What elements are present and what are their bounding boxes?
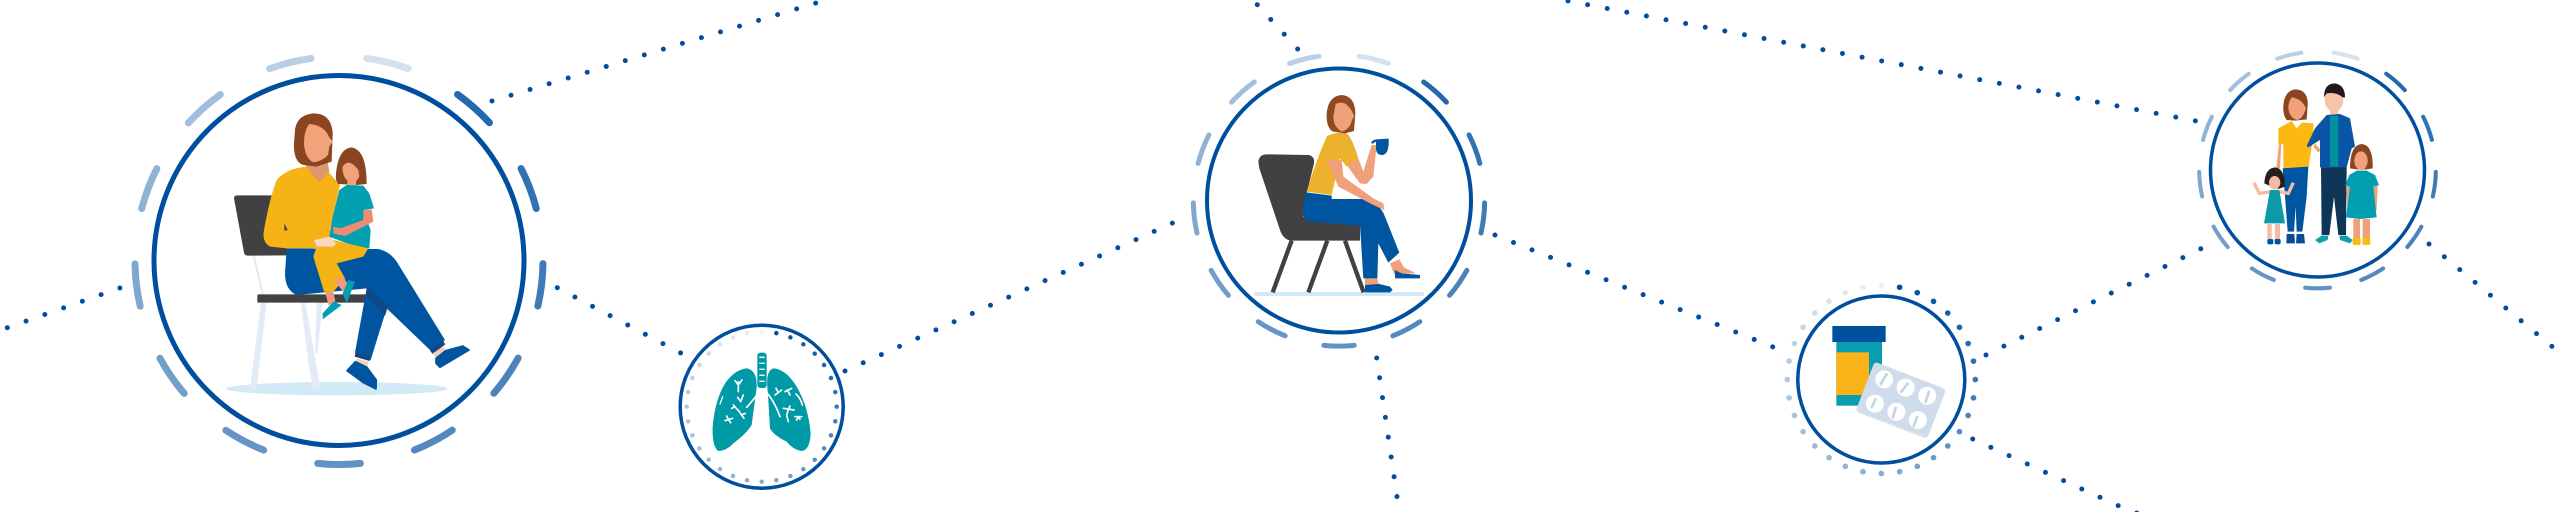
icon: family of four [2254, 83, 2379, 245]
dotted connector: left edge to parent and child node [7, 288, 120, 328]
node: medication [1784, 283, 1978, 476]
node: family [2150, 3, 2485, 337]
dotted connector: parent and child node to top edge [492, 3, 816, 101]
dotted connector: family node to right edge [2429, 244, 2552, 346]
dotted connector: medication node to bottom edge [1973, 439, 2139, 512]
circle outline [1798, 296, 1965, 463]
icon: seated woman holding a mug [1254, 95, 1424, 296]
circle outline [2210, 63, 2424, 277]
node: woman with mug [1133, 0, 1545, 406]
dotted ring [1784, 283, 1978, 476]
dotted connector: medication node to family node [1986, 249, 2201, 355]
circle outline [154, 76, 524, 446]
dotted connector: seated woman node to medication node [1495, 235, 1773, 347]
icon: woman seated with child on lap [226, 113, 469, 395]
dashed ring [2150, 3, 2485, 337]
icon: lungs [713, 353, 811, 451]
dotted connector: lungs node to seated woman node [845, 223, 1173, 371]
dotted connector: top edge to seated woman node [1257, 5, 1298, 49]
dotted connector: seated woman node to bottom edge [1377, 358, 1397, 497]
node: lungs [680, 325, 843, 488]
dotted ring [684, 329, 839, 484]
circle outline [680, 325, 843, 488]
icon: pill bottle and blister pack [1832, 326, 1946, 439]
node: parent with child [51, 0, 627, 512]
dotted connector: top edge to family node [1568, 1, 2196, 121]
dashed ring [51, 0, 627, 512]
circle outline [1207, 68, 1471, 332]
dashed ring [1133, 0, 1545, 406]
dotted connector: parent and child node to lungs node [557, 288, 681, 353]
